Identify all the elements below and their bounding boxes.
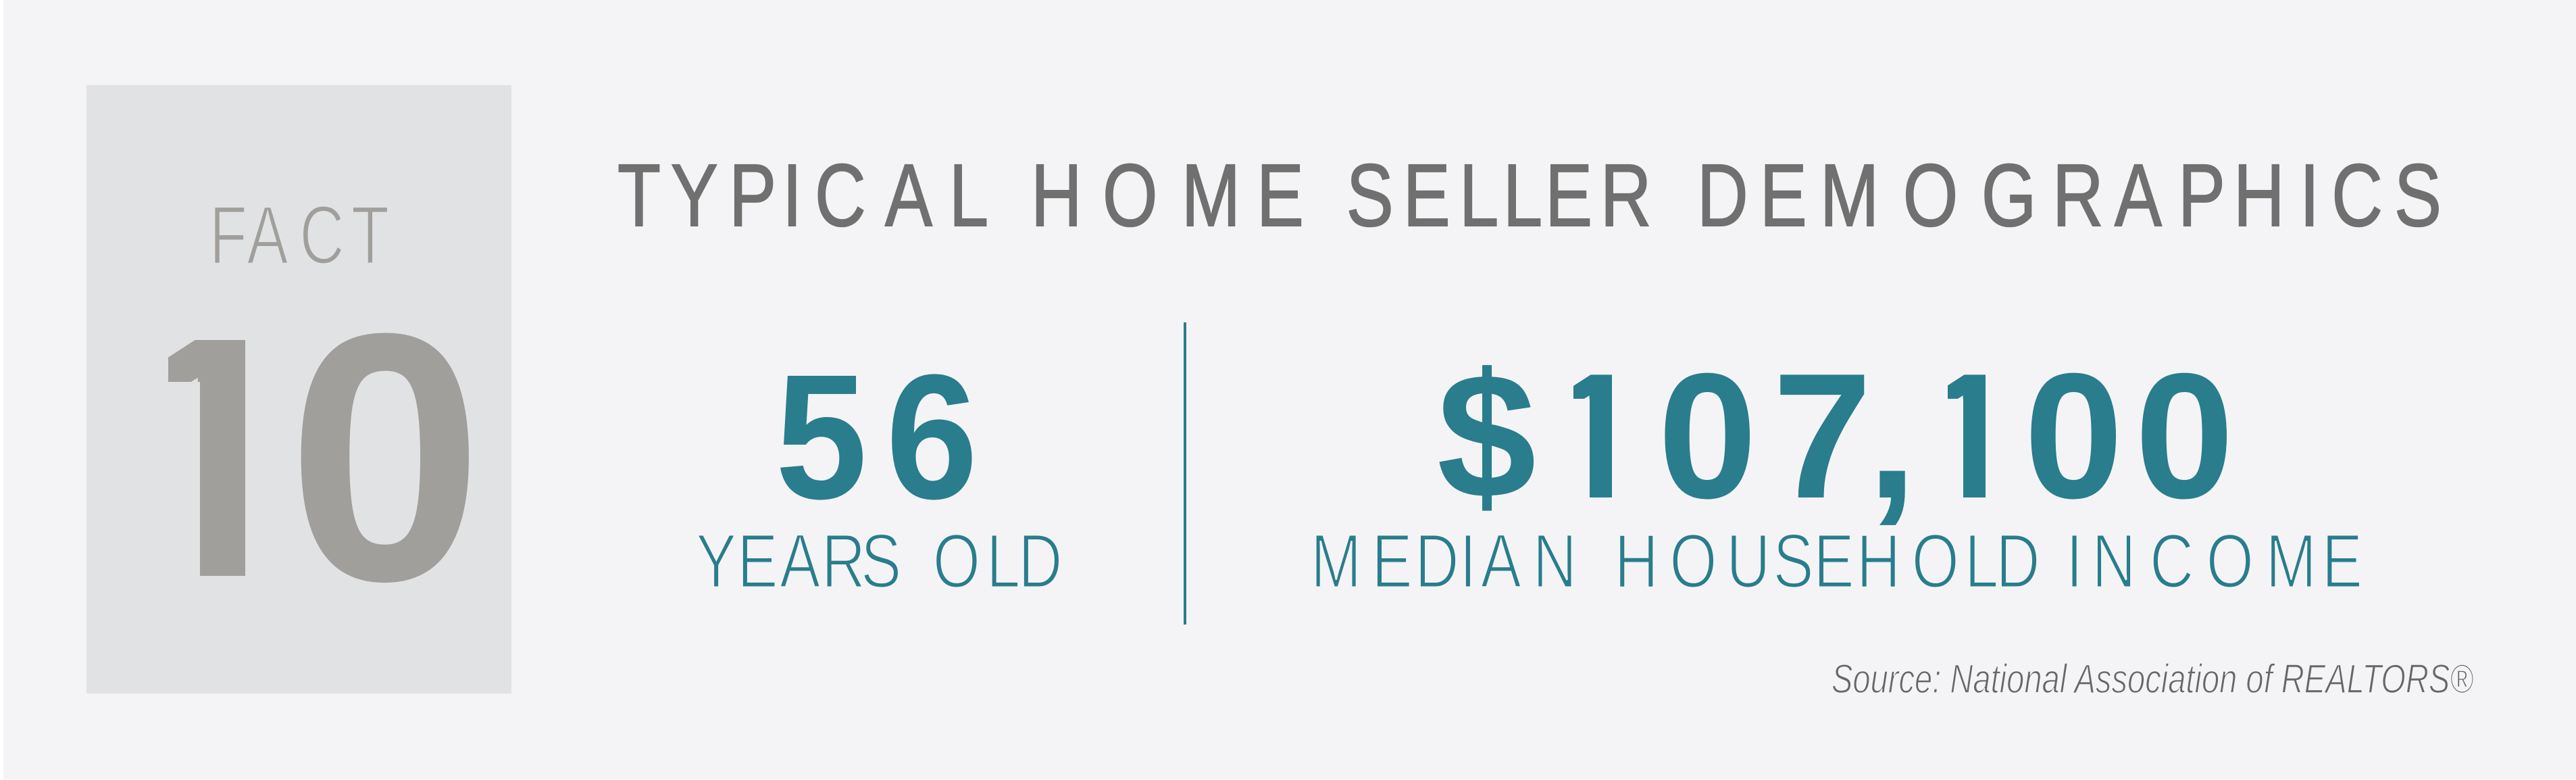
income number: $107,100 <box>1437 336 2234 535</box>
income label: MEDIAN HOUSEHOLD INCOME <box>1311 518 2363 604</box>
panel: fact badge <box>86 85 511 693</box>
divider <box>1184 322 1186 625</box>
title: TYPICAL HOME SELLER DEMOGRAPHICS <box>617 147 2442 245</box>
fact label: FACT <box>209 189 389 282</box>
age number: 56 <box>776 337 978 536</box>
fact number: 10 <box>116 260 483 654</box>
statistic: age <box>696 337 1062 604</box>
age label: YEARS OLD <box>696 518 1062 604</box>
statistic: income <box>1316 365 2359 587</box>
